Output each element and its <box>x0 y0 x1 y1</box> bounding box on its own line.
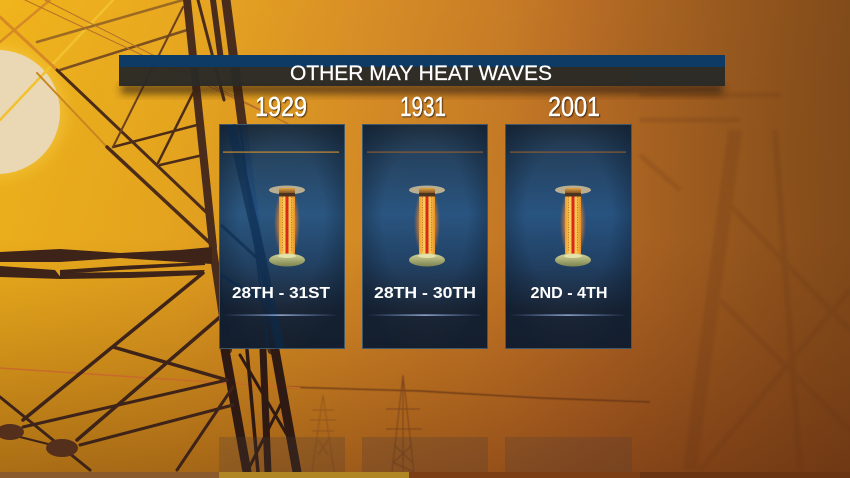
icon: thermometer <box>409 185 445 266</box>
bottom reflection strip <box>0 472 850 478</box>
title: OTHER MAY HEAT WAVES <box>290 62 552 85</box>
sun <box>0 36 76 188</box>
date range: 28TH - 30TH <box>374 285 476 302</box>
year 1929: 1929 <box>255 91 307 122</box>
tower seen through the panel <box>221 125 280 348</box>
horizontal arm <box>0 247 212 279</box>
upper bracing <box>57 7 210 243</box>
title bar <box>119 55 725 94</box>
icon: thermometer <box>269 185 305 266</box>
bottom panel reflections <box>219 437 632 472</box>
year 1931: 1931 <box>400 91 446 122</box>
date range: 2ND - 4TH <box>530 285 608 302</box>
insulator clusters <box>0 424 78 457</box>
panel: 2001 <box>506 91 632 348</box>
distant tower scene <box>286 375 650 472</box>
icon: thermometer <box>555 185 591 266</box>
main tower legs <box>187 0 297 472</box>
panel: 1931 <box>362 91 488 348</box>
year 2001: 2001 <box>548 91 600 122</box>
lower bracing <box>0 273 233 470</box>
date range: 28TH - 31ST <box>232 285 330 302</box>
foreground pylon <box>0 0 300 472</box>
sunlit wires and struts <box>0 0 300 388</box>
panel: 1929 <box>220 91 344 348</box>
ghost tower at right <box>640 95 850 470</box>
